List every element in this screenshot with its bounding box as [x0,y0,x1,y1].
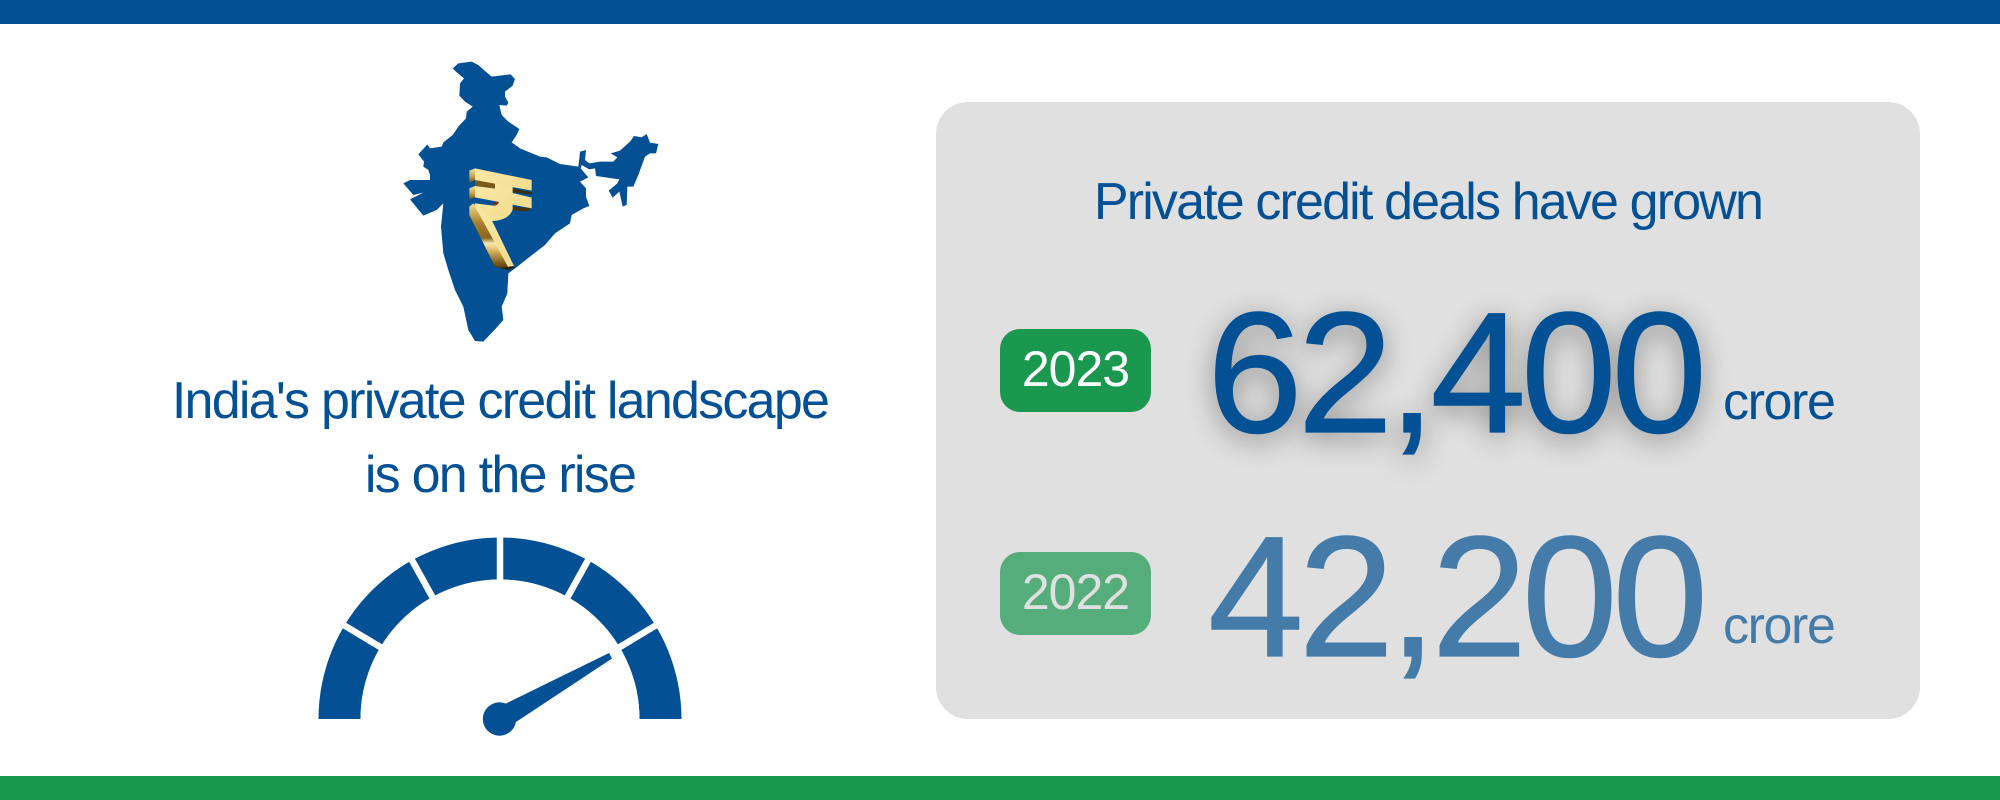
panel: deals [936,102,1920,719]
heading: India's private credit landscape: India's private credit landscape [172,372,828,430]
top bar [0,0,2000,24]
badge 2022 [1000,552,1151,635]
badge 2023 [1000,329,1151,412]
icon: India map with rupee [403,62,658,342]
number 42,200: 42,200 [1208,501,1703,693]
badge 2022: 2022 [1022,564,1129,620]
number 62,400: 62,400 [1207,277,1702,469]
heading: India's private credit landscape: is on the rise [365,446,635,504]
bottom bar [0,776,2000,800]
needle [483,653,612,736]
unit crore: crore [1723,373,1834,431]
icon: gold rupee [469,168,532,270]
unit crore: crore [1723,597,1834,655]
icon: speedometer gauge [318,538,682,736]
badge 2023: 2023 [1022,341,1129,397]
heading: Private credit deals have grown: Private credit deals have grown [1094,173,1762,231]
heading: India's private credit landscape [172,372,828,504]
